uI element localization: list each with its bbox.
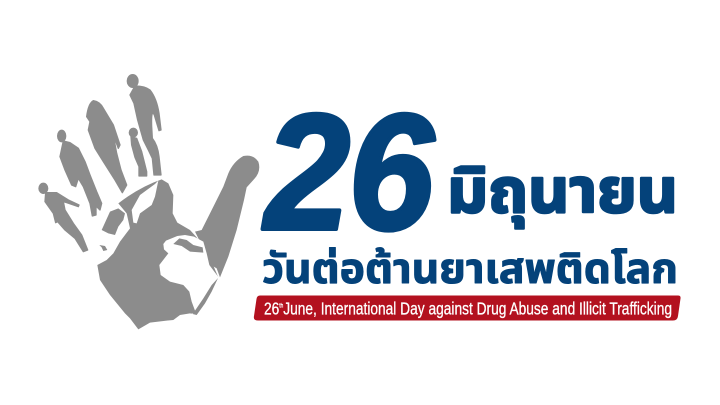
icon: people as fingers <box>39 75 161 252</box>
heading: June in Thai: มิถุนายน <box>447 157 678 228</box>
globe: British Isles <box>102 208 125 235</box>
icon: thumb <box>195 156 259 277</box>
icon: globe <box>97 179 219 329</box>
icon: hand print with people and globe <box>39 75 259 329</box>
icon: person on little finger <box>39 183 88 252</box>
heading: World Drug Day in Thai: วันต่อต้านยาเสพติดโลก <box>262 245 678 292</box>
globe: Atlantic ocean land mass <box>97 179 218 329</box>
icon: woman on middle finger <box>87 101 127 193</box>
globe: Europe and Africa cut-out <box>159 235 219 311</box>
heading: 26: 26 <box>262 80 435 264</box>
globe: small Caribbean islands <box>99 245 107 251</box>
globe: Greenland cut-out <box>132 181 158 223</box>
icon: child on index finger <box>129 128 147 176</box>
banner text: th <box>279 304 283 310</box>
globe: south coast gaps <box>167 313 193 323</box>
banner: English title <box>254 296 681 320</box>
icon: person on ring finger <box>58 130 102 216</box>
globe: Mediterranean sea <box>173 238 203 253</box>
banner background <box>254 296 681 320</box>
banner text: 26 <box>264 298 283 318</box>
icon: adult on index finger <box>127 75 161 175</box>
